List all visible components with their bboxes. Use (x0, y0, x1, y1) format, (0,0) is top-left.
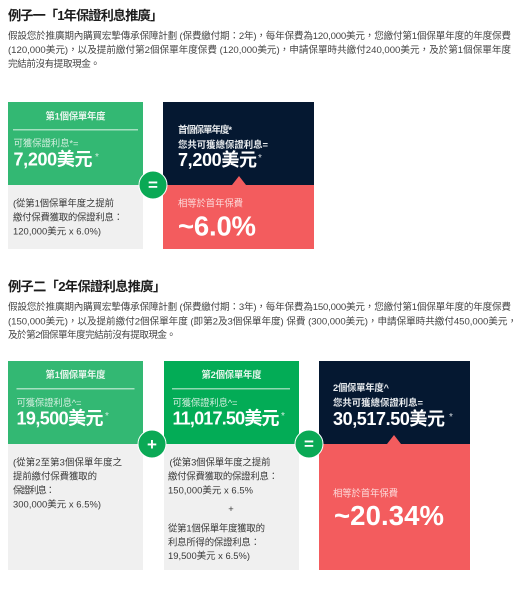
text block: example one description: 假設您於推廣期內購買宏摯傳承保障計劃 (保費繳付期：2年)，每年保費為120,000美元，您繳付第1個保單年度的年度保費 (8, 30, 511, 42)
panel: example two second policy year: 第2個保單年度 (202, 369, 262, 380)
panel: example two second policy year: 可獲保證利息^= (172, 397, 238, 408)
panel: example two first policy year: (從第2至第3個保單年度之 (13, 456, 122, 468)
panel: example two total interest: 相等於首年保費 (333, 488, 398, 498)
panel: example two second policy year: 從第1個保單年度獲取的 (168, 522, 265, 534)
panel: example two total interest (319, 361, 470, 570)
panel: example two first policy year: * (105, 411, 109, 422)
panel: example two total interest: ~20.34% (334, 500, 444, 531)
icon: equals circle (139, 171, 167, 199)
panel: example two first policy year: 19,500美元 (16, 408, 104, 428)
panel: example one total interest: 首個保單年度* (178, 124, 232, 135)
panel: example two first policy year: 300,000美元 x 6.5%) (13, 498, 101, 510)
text block: example one description (8, 30, 511, 70)
panel: example two total interest: 2個保單年度^ (333, 382, 390, 393)
panel: example one first policy year: 第1個保單年度 (46, 110, 106, 122)
text block: example two description (8, 301, 517, 341)
panel: example one total interest: * (258, 153, 262, 164)
panel: example one first policy year: 7,200美元 (14, 148, 92, 170)
panel: example two first policy year: 第1個保單年度 (46, 369, 106, 380)
icon: plus circle: + (147, 435, 157, 454)
panel: example two first policy year: 可獲保證利息^= (16, 397, 82, 408)
text block: example one description: 完結前沒有提取現金。 (8, 58, 100, 70)
panel: example one total interest: 您共可獲總保證利息= (178, 139, 269, 150)
panel: example one first policy year (8, 102, 143, 249)
panel: example two second policy year: * (281, 411, 285, 422)
panel: example two second policy year: 19,500美元 x 6.5%) (168, 550, 250, 561)
panel: example two total interest: 您共可獲總保證利息= (333, 397, 424, 408)
panel: example one first policy year: 可獲保證利息*= (14, 138, 79, 148)
panel: example two second policy year: 150,000美元 x 6.5% (168, 484, 253, 496)
panel: example two second policy year: + (228, 503, 234, 514)
heading: example one: 例子一「1年保證利息推廣」 (8, 7, 163, 23)
panel: example one first policy year: * (95, 152, 99, 163)
panel: example two second policy year: (從第3個保單年度之提前 (170, 456, 270, 468)
icon: equals circle (295, 430, 323, 458)
icon: equals circle: = (304, 434, 314, 454)
panel: example one first policy year: (從第1個保單年度之提前 (13, 198, 114, 208)
text block: example two description: 假設您於推廣期內購買宏摯傳承保障計劃 (保費繳付期：3年)，每年保費為150,000美元，您繳付第1個保單年度的年度保費 (8, 301, 511, 313)
heading: example two: 例子二「2年保證利息推廣」 (8, 278, 166, 294)
panel: example two second policy year (164, 361, 299, 570)
panel: example two total interest: * (449, 412, 453, 423)
panel: example one total interest: ~6.0% (178, 210, 256, 242)
panel: example one first policy year: 繳付保費獲取的保證利息： (13, 212, 123, 222)
panel: example one total interest: 7,200美元 (178, 149, 257, 170)
panel: example two first policy year: 保證利息： (13, 484, 55, 496)
text block: example two description: 及於第2個保單年度完結前沒有提取現金。 (8, 329, 176, 341)
panel: example two first policy year: 提前繳付保費獲取的 (13, 470, 97, 482)
panel: example one total interest (163, 102, 314, 249)
panel: example two first policy year (8, 361, 143, 570)
icon: equals circle: = (148, 176, 158, 194)
panel: example one first policy year: 120,000美元 x 6.0%) (13, 226, 101, 236)
text block: example two description: (150,000美元)，以及提前繳付2個保單年度 (即第2及3個保單年度) 保費 (300,000美元)，申請保單時共繳付450,000美元， (8, 316, 517, 328)
icon: plus circle (138, 430, 166, 458)
panel: example two second policy year: 利息所得的保證利息： (168, 536, 260, 548)
panel: example two second policy year: 繳付保費獲取的保證利息： (168, 470, 278, 482)
text block: example one description: (120,000美元)，以及提前繳付第2個保單年度保費 (120,000美元)，申請保單時共繳付240,000美元，及於第1個保單年度 (8, 44, 511, 56)
panel: example two second policy year: 11,017.50美元 (172, 408, 280, 428)
panel: example one total interest: 相等於首年保費 (178, 198, 243, 208)
panel: example two total interest: 30,517.50美元 (333, 408, 445, 429)
